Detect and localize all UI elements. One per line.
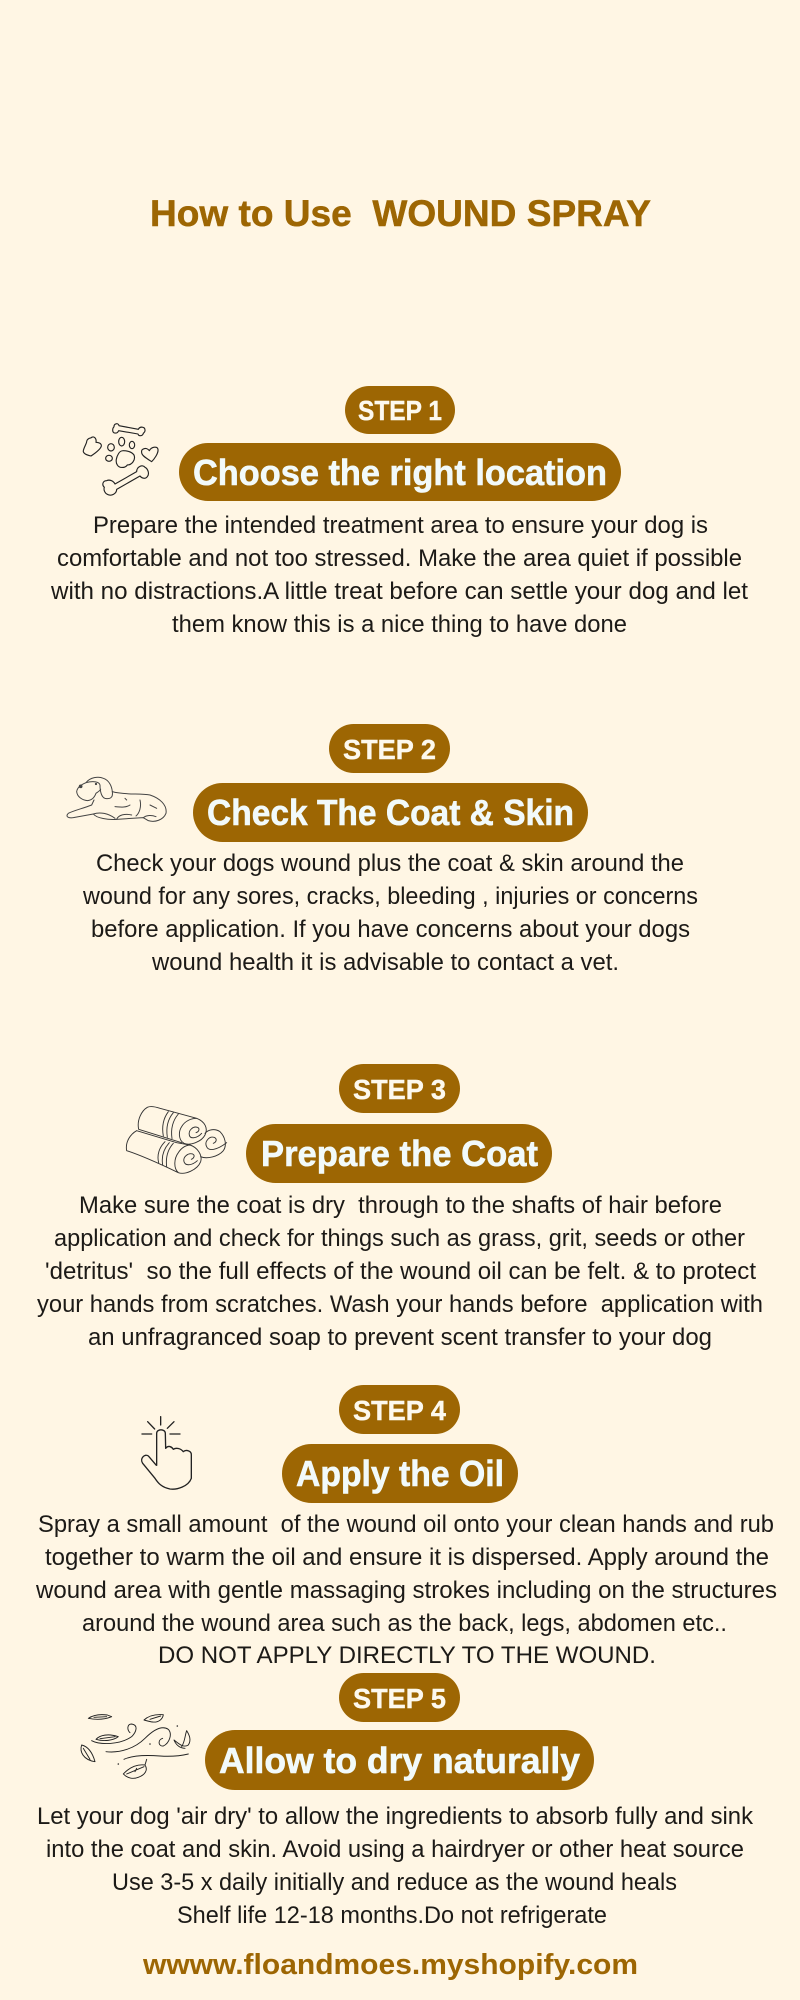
step 4 text: around the wound area such as the back, legs, abdomen etc.. xyxy=(82,1610,727,1637)
step 4 badge: STEP 4 xyxy=(353,1395,446,1426)
step 2 heading xyxy=(193,783,588,842)
panel: step 3 xyxy=(37,1064,763,1351)
step 2 text: wound health it is advisable to contact a vet. xyxy=(151,949,619,976)
step 3 text: application and check for things such as grass, grit, seeds or other xyxy=(54,1225,745,1252)
step 5 text: Let your dog 'air dry' to allow the ingredients to absorb fully and sink xyxy=(37,1803,754,1830)
footer website: wwww.floandmoes.myshopify.com xyxy=(142,1949,638,1981)
step 5 badge: STEP 5 xyxy=(353,1683,446,1714)
step 4 text: DO NOT APPLY DIRECTLY TO THE WOUND. xyxy=(158,1642,656,1669)
step 5 text xyxy=(37,1803,754,1929)
step 3 text xyxy=(37,1192,763,1351)
icon: rolled towels xyxy=(126,1107,227,1173)
step 5 text: into the coat and skin. Avoid using a hairdryer or other heat source xyxy=(46,1836,744,1863)
step 3 badge xyxy=(339,1064,460,1113)
step 1 badge xyxy=(345,386,455,434)
step 5 text: Use 3-5 x daily initially and reduce as the wound heals xyxy=(112,1869,677,1896)
step 1 text: them know this is a nice thing to have done xyxy=(172,611,627,638)
step 2 badge xyxy=(329,724,450,773)
panel: step 4 xyxy=(35,1385,777,1669)
step 2 text: before application. If you have concerns about your dogs xyxy=(91,916,690,943)
step 4 heading xyxy=(282,1444,518,1503)
step 2 text xyxy=(82,850,698,976)
step 2 heading: Check The Coat & Skin xyxy=(207,792,574,833)
step 4 text: wound area with gentle massaging strokes including on the structures xyxy=(35,1577,777,1604)
step 1 heading xyxy=(179,443,621,501)
step 1 heading: Choose the right location xyxy=(193,452,607,493)
step 1 text: comfortable and not too stressed. Make the area quiet if possible xyxy=(57,545,742,572)
icon: pointing hand xyxy=(142,1417,191,1489)
icon: paw, bones and hearts xyxy=(83,424,158,495)
step 3 text: your hands from scratches. Wash your hands before application with xyxy=(37,1291,763,1318)
step 5 text: Shelf life 12-18 months.Do not refrigerate xyxy=(177,1902,607,1929)
step 4 text xyxy=(35,1511,777,1669)
step 3 heading: Prepare the Coat xyxy=(261,1133,538,1174)
step 3 text: an unfragranced soap to prevent scent transfer to your dog xyxy=(88,1324,712,1351)
step 2 text: wound for any sores, cracks, bleeding , injuries or concerns xyxy=(82,883,698,910)
step 1 text: with no distractions.A little treat before can settle your dog and let xyxy=(50,578,748,605)
step 4 badge xyxy=(339,1385,460,1434)
step 3 heading xyxy=(246,1124,552,1183)
step 1 badge: STEP 1 xyxy=(358,395,442,426)
step 3 text: Make sure the coat is dry through to the shafts of hair before xyxy=(79,1192,722,1219)
icon: wind and leaves xyxy=(81,1715,190,1778)
step 1 text: Prepare the intended treatment area to ensure your dog is xyxy=(93,512,708,539)
icon: resting dog xyxy=(67,777,166,821)
step 2 text: Check your dogs wound plus the coat & skin around the xyxy=(96,850,684,877)
step 4 heading: Apply the Oil xyxy=(296,1453,504,1494)
step 5 heading: Allow to dry naturally xyxy=(219,1740,580,1781)
step 4 text: Spray a small amount of the wound oil onto your clean hands and rub xyxy=(38,1511,774,1538)
step 2 badge: STEP 2 xyxy=(343,734,436,765)
panel: step 1 xyxy=(50,386,748,638)
step 1 text xyxy=(50,512,748,638)
step 5 heading xyxy=(205,1730,594,1790)
step 4 text: together to warm the oil and ensure it is dispersed. Apply around the xyxy=(45,1544,769,1571)
panel: step 5 xyxy=(37,1673,754,1929)
title: How to Use WOUND SPRAY xyxy=(150,193,651,234)
step 5 badge xyxy=(339,1673,460,1722)
step 3 text: 'detritus' so the full effects of the wound oil can be felt. & to protect xyxy=(45,1258,756,1285)
panel: step 2 xyxy=(67,724,698,976)
step 3 badge: STEP 3 xyxy=(353,1074,446,1105)
